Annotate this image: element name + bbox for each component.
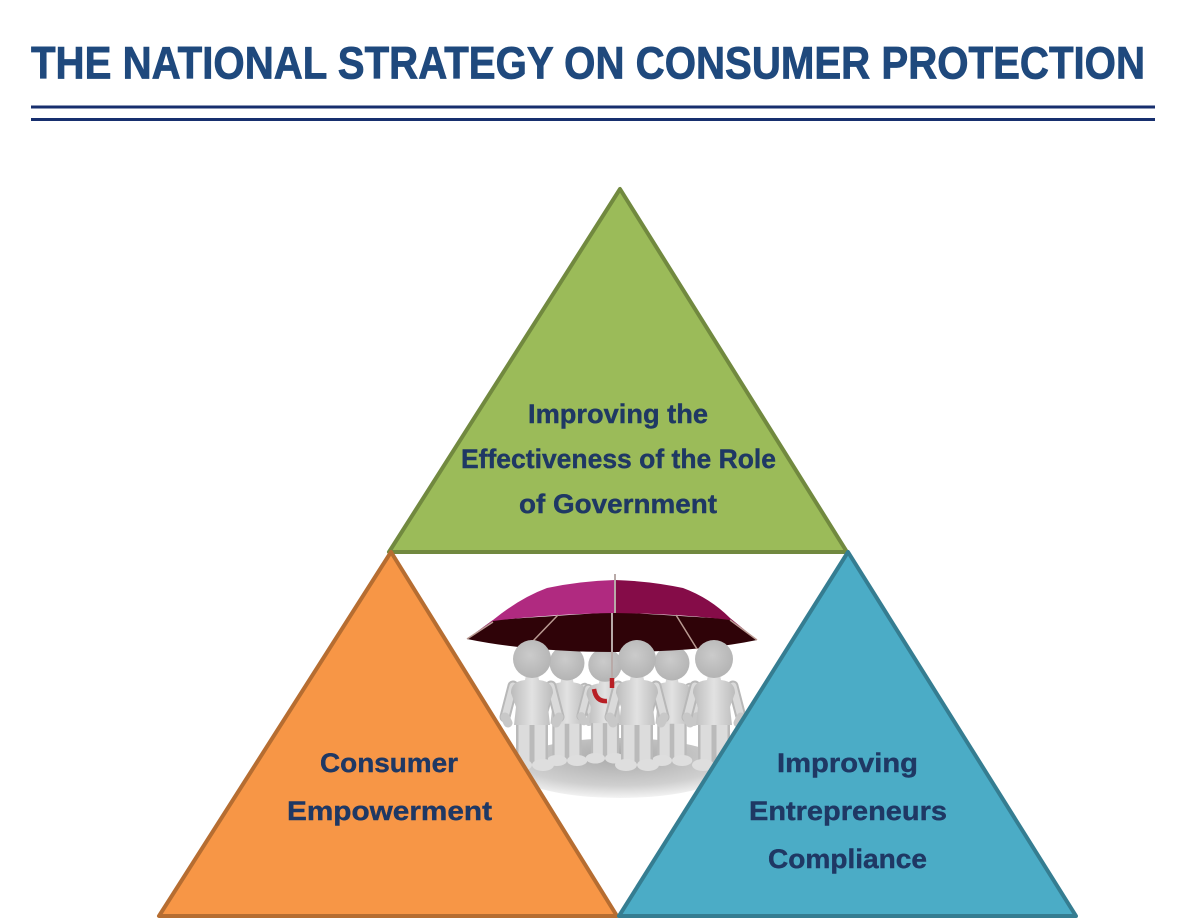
label: consumer — [287, 748, 492, 826]
icon: umbrella handle — [594, 678, 612, 701]
label: entrepreneurs — [749, 748, 947, 874]
label: consumer: Empowerment — [287, 796, 492, 826]
label: entrepreneurs: Compliance — [768, 844, 927, 874]
illustration: people under umbrella — [467, 574, 757, 798]
label: consumer: Consumer — [320, 748, 459, 778]
label: entrepreneurs: Improving — [777, 748, 918, 778]
label: government: Effectiveness of the Role — [461, 444, 776, 474]
icon: umbrella canopy — [467, 574, 757, 680]
title underline rules — [31, 106, 1155, 121]
label: government: of Government — [519, 489, 717, 519]
icon: front figures — [505, 640, 741, 771]
panel: entrepreneurs compliance — [619, 552, 1076, 916]
panel: consumer empowerment — [159, 552, 617, 916]
ground shadow — [510, 738, 730, 798]
label: entrepreneurs: Entrepreneurs — [749, 796, 947, 826]
label: government: Improving the — [528, 399, 708, 429]
icon: rear figures — [542, 646, 697, 766]
label: government — [461, 399, 776, 519]
panel: improving government effectiveness — [389, 189, 847, 552]
